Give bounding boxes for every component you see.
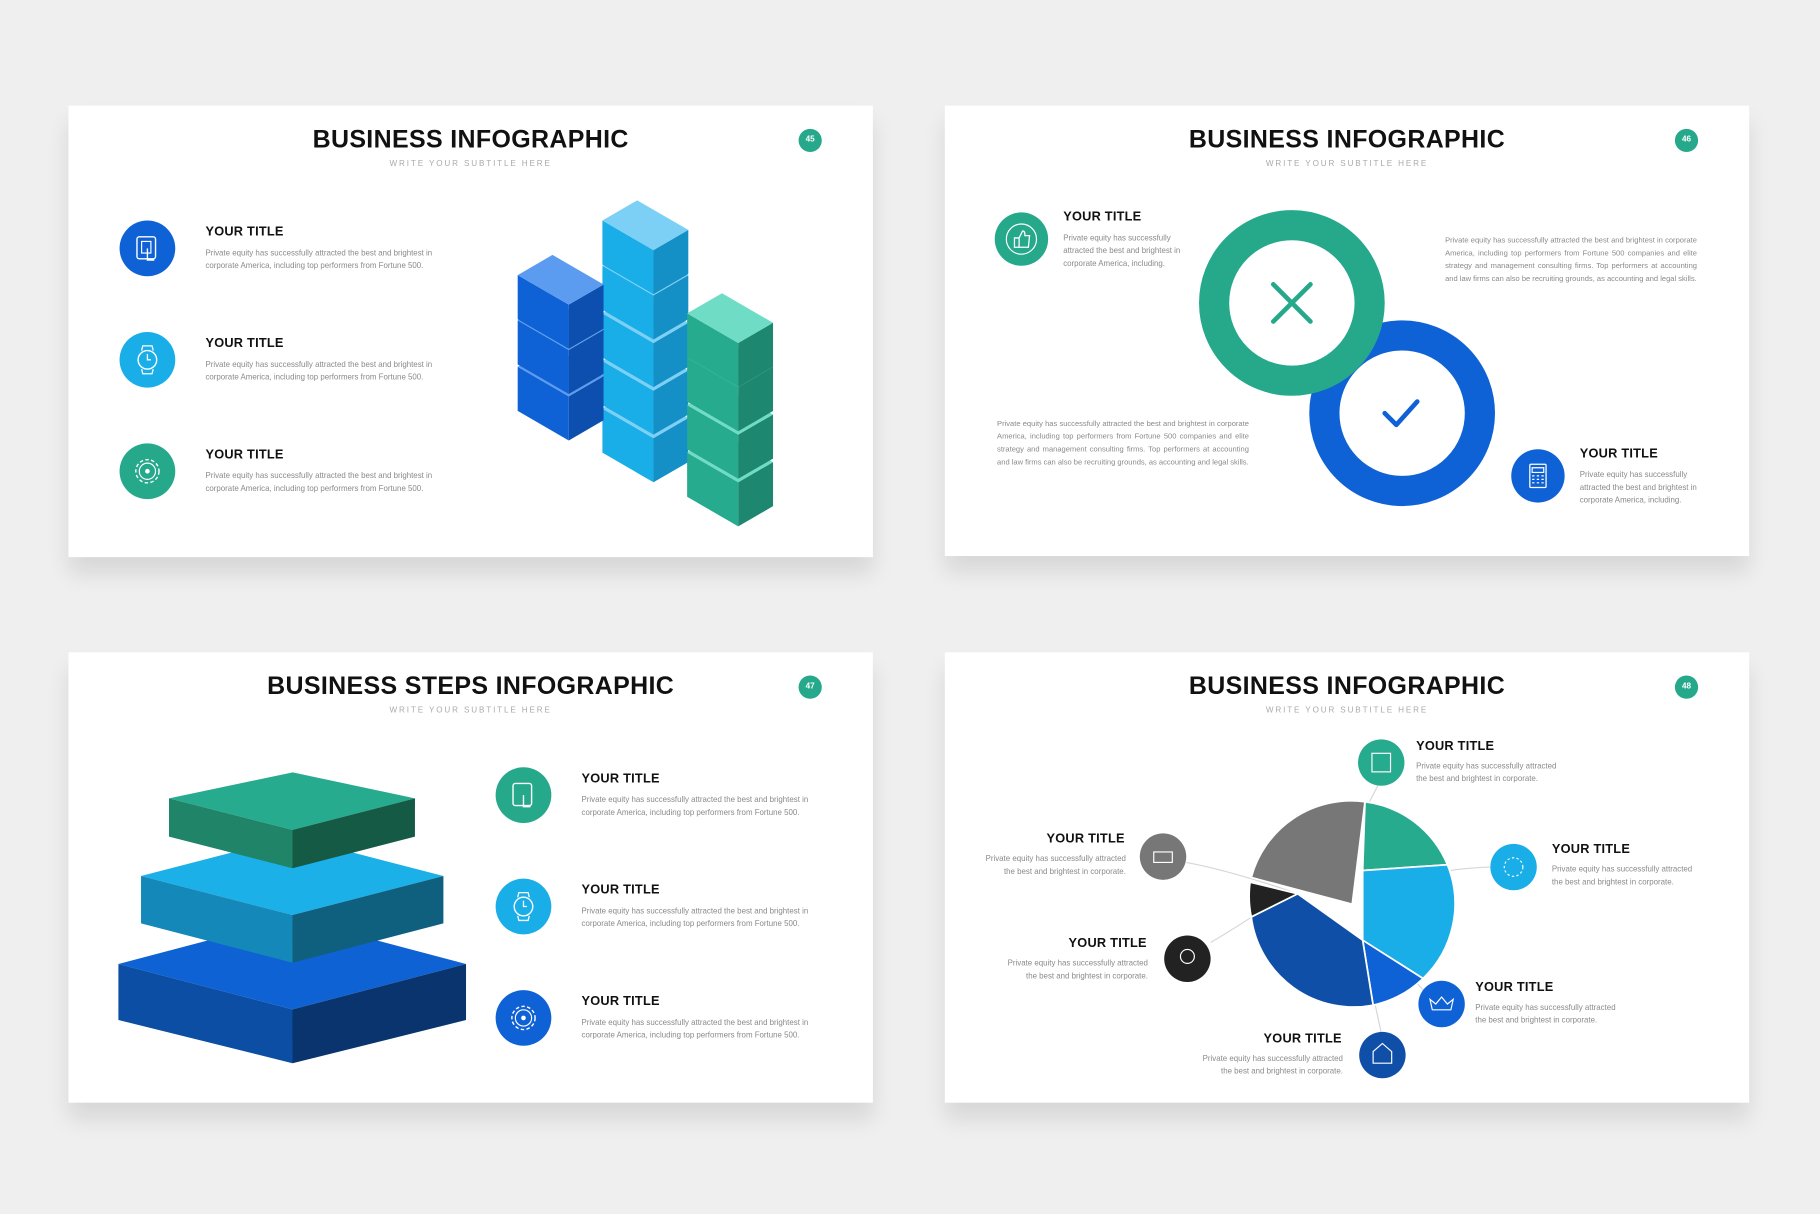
item 1 text: corporate America, including top performers from Fortune 500. [205,262,423,270]
text right [1552,866,1692,887]
text bottom right: the best and brightest in corporate. [1475,1017,1597,1025]
text right: Private equity has successfully attracted [1552,866,1692,874]
badge 48 [1675,676,1698,699]
icon: thumbs up [995,212,1048,266]
text top: Private equity has successfully attracted [1416,763,1556,771]
item 2 text [205,361,432,382]
step 2 text: Private equity has successfully attracted the best and brightest in [582,908,808,916]
icon: gear [120,443,175,499]
step 1 text [582,796,808,817]
subtitle: WRITE YOUR SUBTITLE HERE [390,707,552,715]
icon: gear [496,990,551,1046]
item title top: YOUR TITLE [1063,210,1141,224]
item 3 title: YOUR TITLE [205,448,284,462]
item 1 text [205,250,432,270]
chart: stacked layers [118,772,466,1064]
text bottom right [1475,1004,1616,1025]
title: BUSINESS INFOGRAPHIC [313,125,629,153]
text bottom: Private equity has successfully attracted [1203,1055,1343,1063]
step 2 title: YOUR TITLE [582,883,660,897]
text top [1416,762,1556,783]
label bottom: YOUR TITLE [1264,1032,1342,1046]
text left upper: Private equity has successfully attracted [986,855,1126,864]
icon: tablet touch [496,767,551,823]
step 2 text [582,908,808,929]
label right: YOUR TITLE [1552,843,1630,857]
badge 47 [799,676,822,699]
step 2 text: corporate America, including top performers from Fortune 500. [582,920,799,929]
step 1 text: corporate America, including top performers from Fortune 500. [582,809,799,817]
item 1 text: Private equity has successfully attracted the best and brightest in [205,250,432,258]
title: BUSINESS STEPS INFOGRAPHIC [267,672,674,700]
panel: slide 47 steps [68,652,873,1103]
item text bottom: Private equity has successfully attracted the best and brightest in corporate America, including. [1580,471,1697,505]
item 1 title: YOUR TITLE [205,225,284,239]
chart: isometric brick columns [518,200,774,526]
badge 48: 48 [1682,682,1691,691]
item 2 text: corporate America, including top performers from Fortune 500. [205,374,423,382]
step 1 text: Private equity has successfully attracted the best and brightest in [582,796,808,804]
title: BUSINESS INFOGRAPHIC [1189,672,1505,700]
panel: slide 45 isometric bars [68,106,873,557]
item 2 title: YOUR TITLE [205,337,284,351]
text left lower: Private equity has successfully attracted [1008,960,1148,968]
item 3 text: Private equity has successfully attracted the best and brightest in [205,472,432,481]
subtitle: WRITE YOUR SUBTITLE HERE [390,160,552,168]
icon: tablet touch [120,221,175,276]
step 1 title: YOUR TITLE [582,772,660,786]
text left lower: the best and brightest in corporate. [1026,973,1148,981]
icon: watch [120,332,175,388]
label bottom right: YOUR TITLE [1475,981,1553,995]
item 3 text: corporate America, including top performers from Fortune 500. [205,485,423,493]
item 3 text [205,472,432,493]
text right: the best and brightest in corporate. [1552,879,1674,887]
badge 45: 45 [806,136,815,144]
panel: slide 48 pie [945,652,1749,1103]
icon: watch [496,879,551,934]
title: BUSINESS INFOGRAPHIC [1189,125,1505,153]
badge 45 [799,129,822,152]
item 2 text: Private equity has successfully attracted the best and brightest in [205,361,432,369]
badge 47: 47 [806,682,815,691]
step 3 text: corporate America, including top performers from Fortune 500. [582,1032,799,1040]
text left upper: the best and brightest in corporate. [1004,868,1126,876]
icon: calculator [1511,449,1565,503]
text top: the best and brightest in corporate. [1416,775,1538,783]
chart: pie with connectors and icons [1140,739,1537,1078]
subtitle: WRITE YOUR SUBTITLE HERE [1266,160,1428,168]
label top: YOUR TITLE [1416,739,1494,753]
step 3 text: Private equity has successfully attracted the best and brightest in [582,1019,808,1027]
badge 46: 46 [1682,136,1691,144]
subtitle: WRITE YOUR SUBTITLE HERE [1266,707,1428,715]
panel: slide 46 rings [945,106,1749,556]
chart: overlapping rings [1199,210,1495,506]
text bottom [1203,1055,1343,1076]
text bottom: the best and brightest in corporate. [1221,1068,1343,1076]
item text top: Private equity has successfully attracted the best and brightest in corporate America, including. [1063,234,1180,268]
label left upper: YOUR TITLE [1047,832,1125,846]
label left lower: YOUR TITLE [1069,937,1147,951]
step 3 title: YOUR TITLE [582,995,660,1009]
item title bottom: YOUR TITLE [1580,447,1658,461]
text block left: Private equity has successfully attracted the best and brightest in corporate America, including top performers from Fortune 500 companies and elite strategy and management consulting firms. Top performers at accounting and law firms can also be recruiting grounds, as accounting and legal skills. [997,420,1249,467]
step 3 text [582,1019,808,1040]
badge 46 [1675,129,1698,152]
text block right: Private equity has successfully attracted the best and brightest in corporate America, including top performers from Fortune 500 companies and elite strategy and management consulting firms. Top performers at accounting and law firms can also be recruiting grounds, as accounting and legal skills. [1445,237,1697,283]
text left upper [986,855,1126,876]
text bottom right: Private equity has successfully attracted [1475,1004,1616,1012]
text left lower [1008,960,1148,981]
